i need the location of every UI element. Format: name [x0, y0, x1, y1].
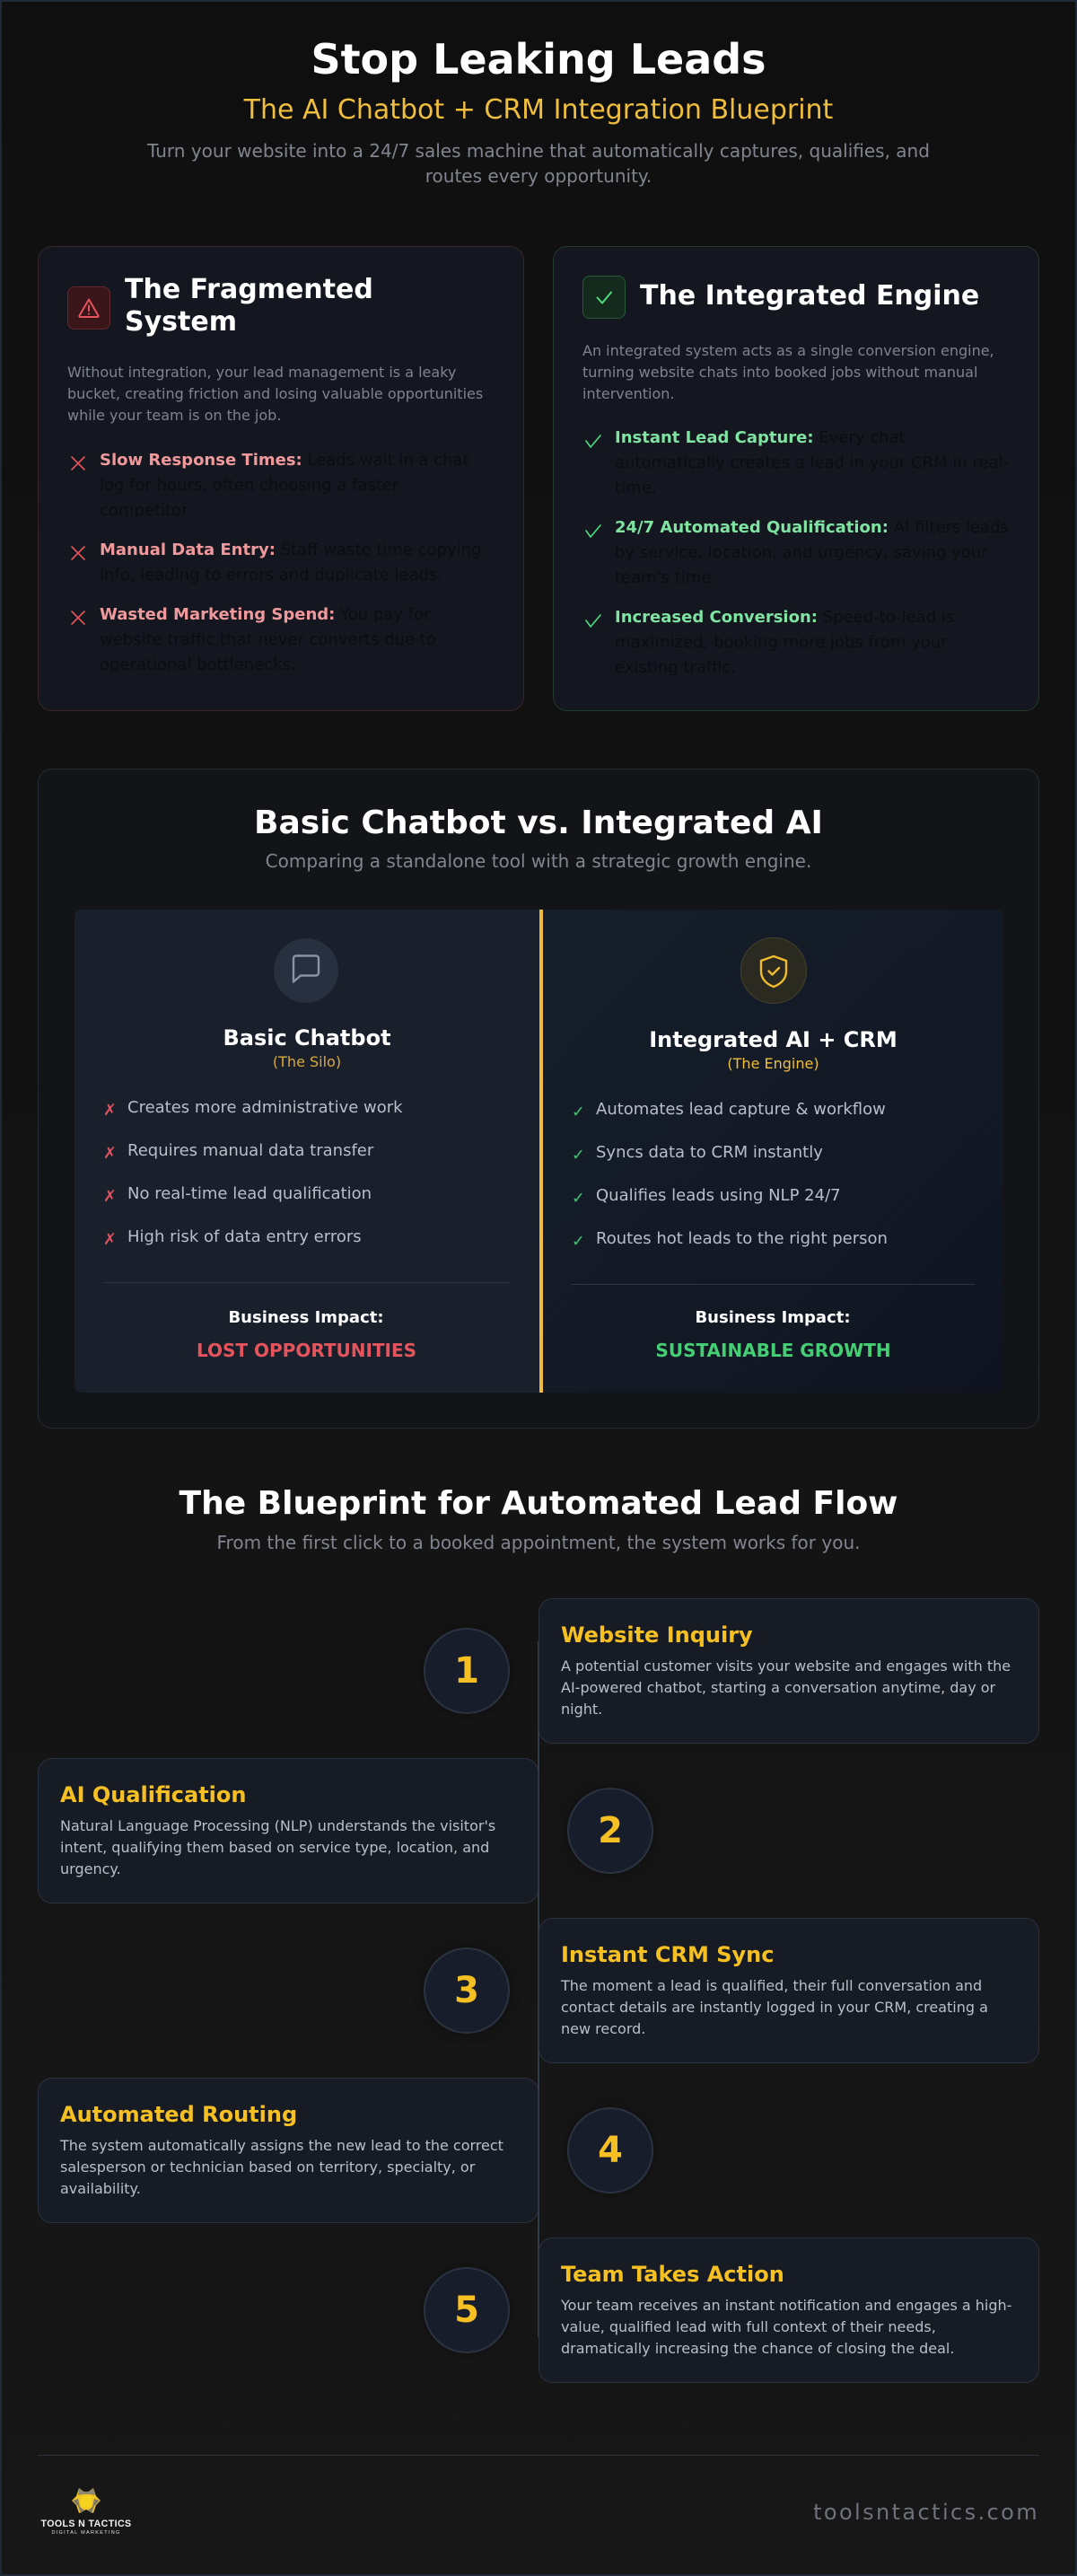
list item: instant capture — [615, 428, 1009, 497]
description — [67, 364, 483, 424]
step 4 card — [38, 2078, 538, 2223]
step title: Team Takes Action — [561, 2262, 784, 2287]
step description: Natural Language Processing (NLP) understands the visitor's — [60, 1817, 495, 1834]
description — [582, 342, 994, 402]
step description: The system automatically assigns the new lead to the correct — [60, 2137, 503, 2154]
step description: A potential customer visits your website and engages with the — [561, 1657, 1011, 1675]
list item: instant capture: automatically creates a lead in your CRM in real- — [615, 453, 1009, 472]
list item: manual data — [100, 541, 481, 585]
brand name: TOOLS N TACTICS — [41, 2519, 131, 2529]
icon: check — [582, 276, 626, 319]
heading: The Fragmented — [125, 274, 373, 305]
list item: slow response: Slow Response Times: Leads wait in a chat — [100, 451, 469, 470]
icon: warning — [67, 286, 110, 330]
logo — [41, 2488, 131, 2536]
subheading: Comparing a standalone tool with a strategic growth engine. — [266, 850, 811, 872]
icon: check — [585, 524, 601, 538]
list item: automated qualification: team's time. — [615, 568, 716, 587]
column subtitle: (The Engine) — [727, 1055, 819, 1072]
description: bucket, creating friction and losing valuable opportunities — [67, 385, 483, 402]
step 2 number — [567, 1788, 653, 1874]
brand tagline: DIGITAL MARKETING — [51, 2530, 121, 2536]
list item: automated qualification: by service, location, and urgency, saving your — [615, 543, 988, 562]
step description: salesperson or technician based on territory, specialty, or — [60, 2158, 475, 2176]
description: An integrated system acts as a single conversion engine, — [582, 342, 994, 359]
step description — [560, 1977, 988, 2037]
step description: The moment a lead is qualified, their full conversation and — [561, 1977, 982, 1994]
business impact label: Business Impact: — [228, 1308, 384, 1327]
step 3 number — [424, 1947, 510, 2034]
column title: Basic Chatbot — [223, 1025, 391, 1051]
step description — [561, 2297, 1011, 2357]
heading — [125, 274, 373, 338]
step description: urgency. — [60, 1860, 121, 1877]
intro text: routes every opportunity. — [425, 165, 652, 187]
business impact label: Business Impact: — [695, 1308, 851, 1327]
step description — [60, 1817, 495, 1877]
step 2 number: 2 — [598, 1810, 623, 1851]
step description: availability. — [60, 2180, 141, 2197]
heading: System — [125, 306, 237, 338]
panel: the integrated engine — [553, 246, 1039, 711]
intro text — [147, 140, 930, 187]
step description — [59, 2137, 503, 2197]
step 5 card — [538, 2238, 1039, 2383]
item: Automates lead capture & workflow — [596, 1100, 886, 1119]
step 4 number: 4 — [598, 2130, 623, 2171]
check mark: ✓ — [572, 1147, 585, 1165]
description: intervention. — [582, 385, 674, 402]
timeline heading: The Blueprint for Automated Lead Flow — [180, 1485, 898, 1522]
list item: manual data: Manual Data Entry: Staff waste time copying — [100, 541, 481, 559]
column subtitle: (The Silo) — [273, 1053, 341, 1070]
cross mark: ✗ — [103, 1188, 117, 1206]
column title: Integrated AI + CRM — [649, 1027, 898, 1052]
feature list — [572, 1100, 888, 1251]
icon: check — [585, 435, 601, 448]
list item: instant capture: Instant Lead Capture: Every chat — [615, 428, 906, 447]
icon: logo mark — [72, 2488, 101, 2513]
step 1 number: 1 — [454, 1650, 479, 1692]
item: High risk of data entry errors — [127, 1227, 362, 1246]
icon: shield — [740, 937, 807, 1004]
business impact value: SUSTAINABLE GROWTH — [655, 1340, 891, 1361]
step title: AI Qualification — [60, 1782, 246, 1807]
list item: wasted spend: Wasted Marketing Spend: You pay for — [100, 605, 430, 624]
step title: Instant CRM Sync — [561, 1942, 774, 1967]
item: Routes hot leads to the right person — [596, 1229, 888, 1248]
step 5 number — [424, 2267, 510, 2353]
item: Creates more administrative work — [127, 1098, 403, 1117]
list item: wasted spend: website traffic that never converts due to — [100, 630, 436, 649]
list item: wasted spend: operational bottlenecks. — [100, 655, 296, 674]
step description: contact details are instantly logged in your CRM, creating a — [561, 1999, 988, 2016]
subtitle: The AI Chatbot + CRM Integration Blueprint — [244, 94, 833, 126]
check mark: ✓ — [572, 1233, 585, 1251]
list item: increased conversion: existing traffic. — [615, 658, 736, 677]
icon: x — [71, 456, 85, 470]
step 1 card — [538, 1598, 1039, 1744]
step description: AI-powered chatbot, starting a conversation anytime, day or — [561, 1679, 995, 1696]
list item: slow response: log for hours, often choosing a faster — [100, 476, 398, 495]
intro text: Turn your website into a 24/7 sales machine that automatically captures, qualifies, and — [147, 140, 930, 162]
step 1 number — [424, 1628, 510, 1714]
list item: slow response: competitor. — [100, 501, 192, 520]
step title: Automated Routing — [60, 2102, 297, 2127]
step description: new record. — [561, 2020, 645, 2037]
step description: value, qualified lead with full context of their needs, — [561, 2318, 936, 2335]
step title: Website Inquiry — [561, 1622, 753, 1648]
header — [147, 35, 930, 187]
step description: Your team receives an instant notification and engages a high- — [561, 2297, 1011, 2314]
icon: x — [71, 546, 85, 560]
list item: manual data: info, leading to errors and duplicate leads. — [100, 566, 442, 585]
step 3 card — [538, 1918, 1039, 2063]
item: Syncs data to CRM instantly — [596, 1143, 823, 1162]
step 3 number: 3 — [454, 1970, 479, 2011]
panel: the fragmented system — [38, 246, 524, 711]
column: basic chatbot — [74, 910, 539, 1393]
list item: wasted spend — [100, 605, 436, 674]
list item: slow response — [100, 451, 469, 520]
icon: chat bubble — [274, 938, 338, 1003]
step description: dramatically increasing the chance of closing the deal. — [561, 2340, 954, 2357]
list item: automated qualification — [615, 518, 1009, 587]
heading: Basic Chatbot vs. Integrated AI — [254, 804, 823, 841]
heading: The Integrated Engine — [640, 280, 979, 312]
item: Qualifies leads using NLP 24/7 — [596, 1186, 841, 1205]
description: turning website chats into booked jobs without manual — [582, 364, 977, 381]
list item: increased conversion: maximized, booking more jobs from your — [615, 633, 948, 652]
step 5 number: 5 — [454, 2290, 479, 2331]
title: Stop Leaking Leads — [311, 35, 766, 84]
check mark: ✓ — [572, 1103, 585, 1121]
item: Requires manual data transfer — [127, 1141, 373, 1160]
list item: increased conversion: Increased Conversion: Speed-to-lead is — [615, 608, 954, 627]
icon: x — [71, 611, 85, 625]
check mark: ✓ — [572, 1190, 585, 1208]
column: integrated ai + crm — [539, 910, 1003, 1393]
step description: intent, qualifying them based on service type, location, and — [60, 1839, 489, 1856]
cross mark: ✗ — [103, 1231, 117, 1249]
icon: check — [585, 614, 601, 628]
step 4 number — [567, 2107, 653, 2194]
list item: increased conversion — [615, 608, 954, 677]
timeline subheading: From the first click to a booked appointment, the system works for you. — [217, 1532, 860, 1553]
cross mark: ✗ — [103, 1145, 117, 1163]
business impact value: LOST OPPORTUNITIES — [197, 1340, 416, 1361]
description: while your team is on the job. — [67, 407, 281, 424]
list item: automated qualification: 24/7 Automated Qualification: AI filters leads — [615, 518, 1009, 537]
list item: instant capture: time. — [615, 479, 656, 497]
item: No real-time lead qualification — [127, 1184, 372, 1203]
panel: comparison section — [38, 769, 1039, 1429]
description: Without integration, your lead management is a leaky — [67, 364, 456, 381]
feature list — [103, 1098, 403, 1249]
website url: toolsntactics.com — [813, 2500, 1039, 2525]
step description: night. — [561, 1701, 602, 1718]
step 2 card — [38, 1758, 538, 1903]
cross mark: ✗ — [103, 1102, 117, 1120]
step description — [561, 1657, 1011, 1718]
